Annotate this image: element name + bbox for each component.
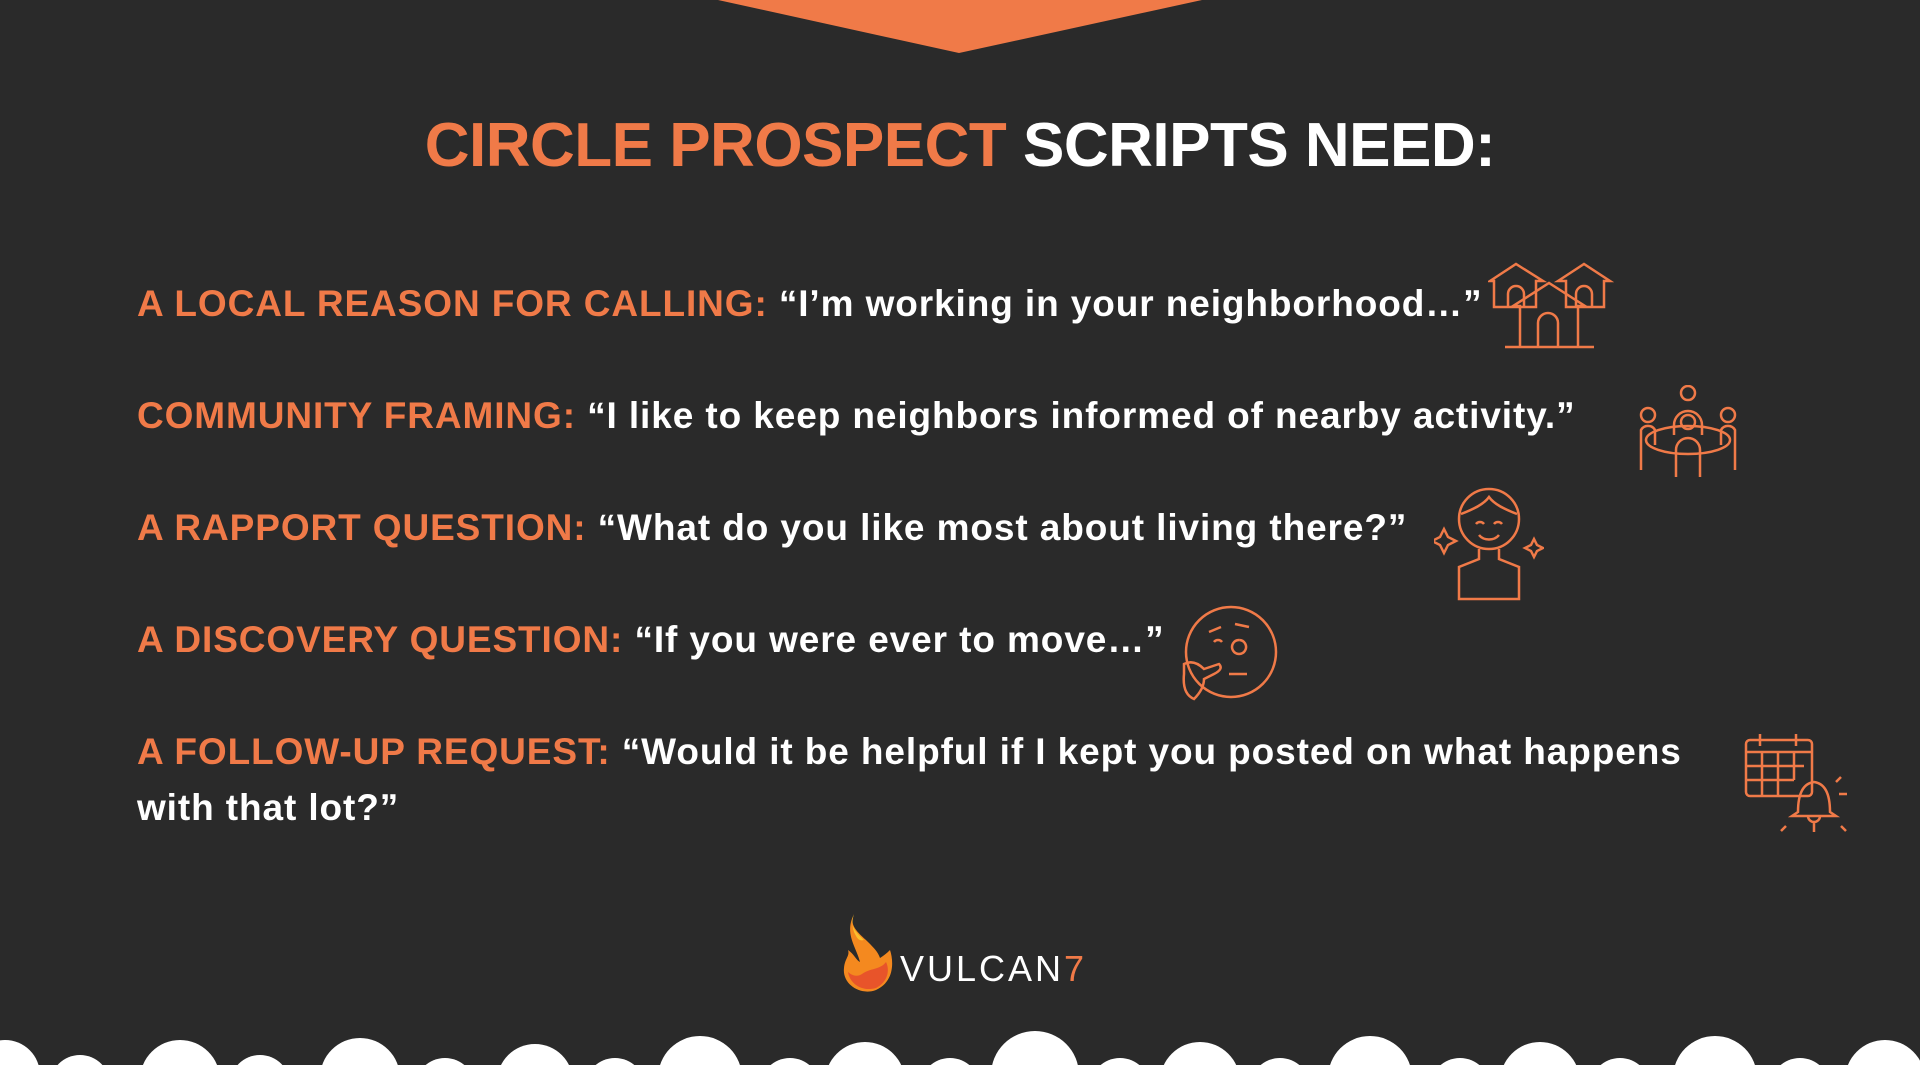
icon: thinking face <box>1182 606 1278 700</box>
logo <box>844 914 1087 992</box>
logo text: VULCAN7 <box>900 948 1087 989</box>
title: CIRCLE PROSPECT SCRIPTS NEED: <box>425 111 1495 180</box>
row 3 text: A RAPPORT QUESTION: “What do you like most about living there?” <box>137 507 1407 548</box>
top orange banner <box>718 0 1202 53</box>
row 4 text: A DISCOVERY QUESTION: “If you were ever to move…” <box>137 619 1165 660</box>
row 1 text: A LOCAL REASON FOR CALLING: “I’m working in your neighborhood…” <box>137 283 1482 324</box>
icon: smiling person <box>1434 488 1544 600</box>
row 5 text: with that lot?” <box>137 787 399 828</box>
icon: calendar bell <box>1744 734 1847 832</box>
row 2 text: COMMUNITY FRAMING: “I like to keep neighbors informed of nearby activity.” <box>137 395 1576 436</box>
clouds footer <box>0 1031 1920 1080</box>
icon: flame <box>844 914 892 992</box>
icon: houses <box>1488 262 1614 348</box>
icon: meeting <box>1640 385 1736 477</box>
row 5 text: A FOLLOW-UP REQUEST: “Would it be helpful if I kept you posted on what happens <box>137 731 1682 772</box>
row 5 text <box>136 731 1682 828</box>
